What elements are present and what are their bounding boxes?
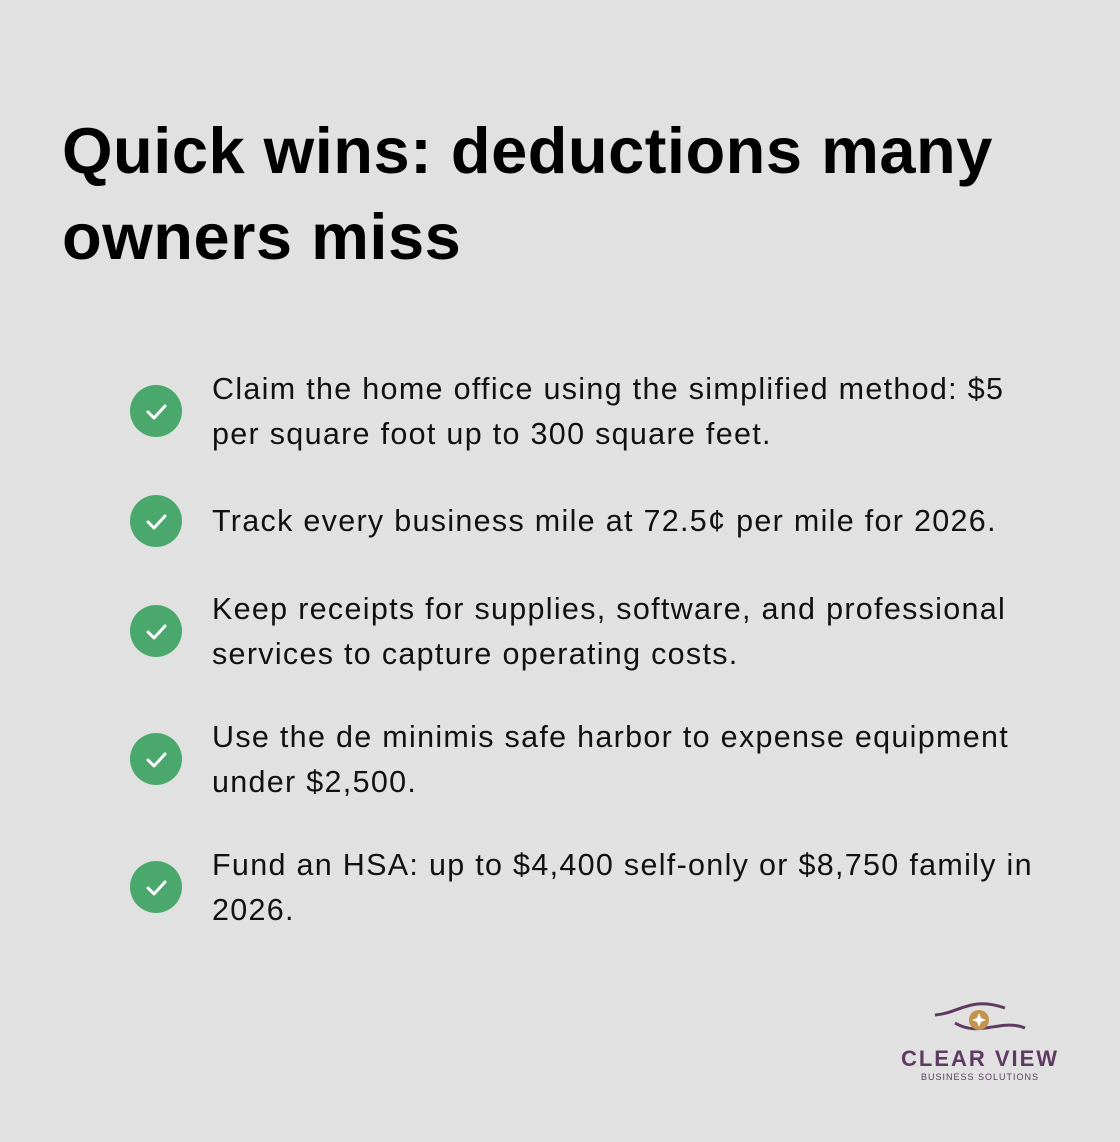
icon: check: [130, 495, 182, 547]
text: Claim the home office using the simplified method: $5: [212, 372, 1004, 406]
text: Keep receipts for supplies, software, and professional: [212, 592, 1006, 626]
icon: check: [130, 385, 182, 437]
text: per square foot up to 300 square feet.: [212, 417, 772, 451]
text: Fund an HSA: up to $4,400 self-only or $8,750 family in: [212, 848, 1033, 882]
item 5: [130, 848, 1033, 927]
text: under $2,500.: [212, 765, 417, 799]
text: [212, 372, 1004, 451]
item 2: [130, 495, 997, 547]
text: [212, 592, 1006, 671]
icon: check: [130, 733, 182, 785]
title: owners miss: [62, 200, 461, 273]
logo: BUSINESS SOLUTIONS: [921, 1072, 1039, 1082]
logo text: CLEAR VIEW: [901, 1046, 1059, 1071]
text: 2026.: [212, 893, 295, 927]
text: [212, 720, 1009, 799]
text: Use the de minimis safe harbor to expense equipment: [212, 720, 1009, 754]
text: [212, 848, 1033, 927]
icon: check: [130, 605, 182, 657]
text: Track every business mile at 72.5¢ per mile for 2026.: [212, 504, 997, 538]
logo: [901, 1002, 1059, 1082]
icon: eye: [934, 1002, 1026, 1030]
title: [62, 114, 993, 273]
item 3: [130, 592, 1006, 671]
item 1: [130, 372, 1004, 451]
title: Quick wins: deductions many: [62, 114, 993, 187]
icon: check: [130, 861, 182, 913]
item 4: [130, 720, 1009, 799]
text: services to capture operating costs.: [212, 637, 739, 671]
